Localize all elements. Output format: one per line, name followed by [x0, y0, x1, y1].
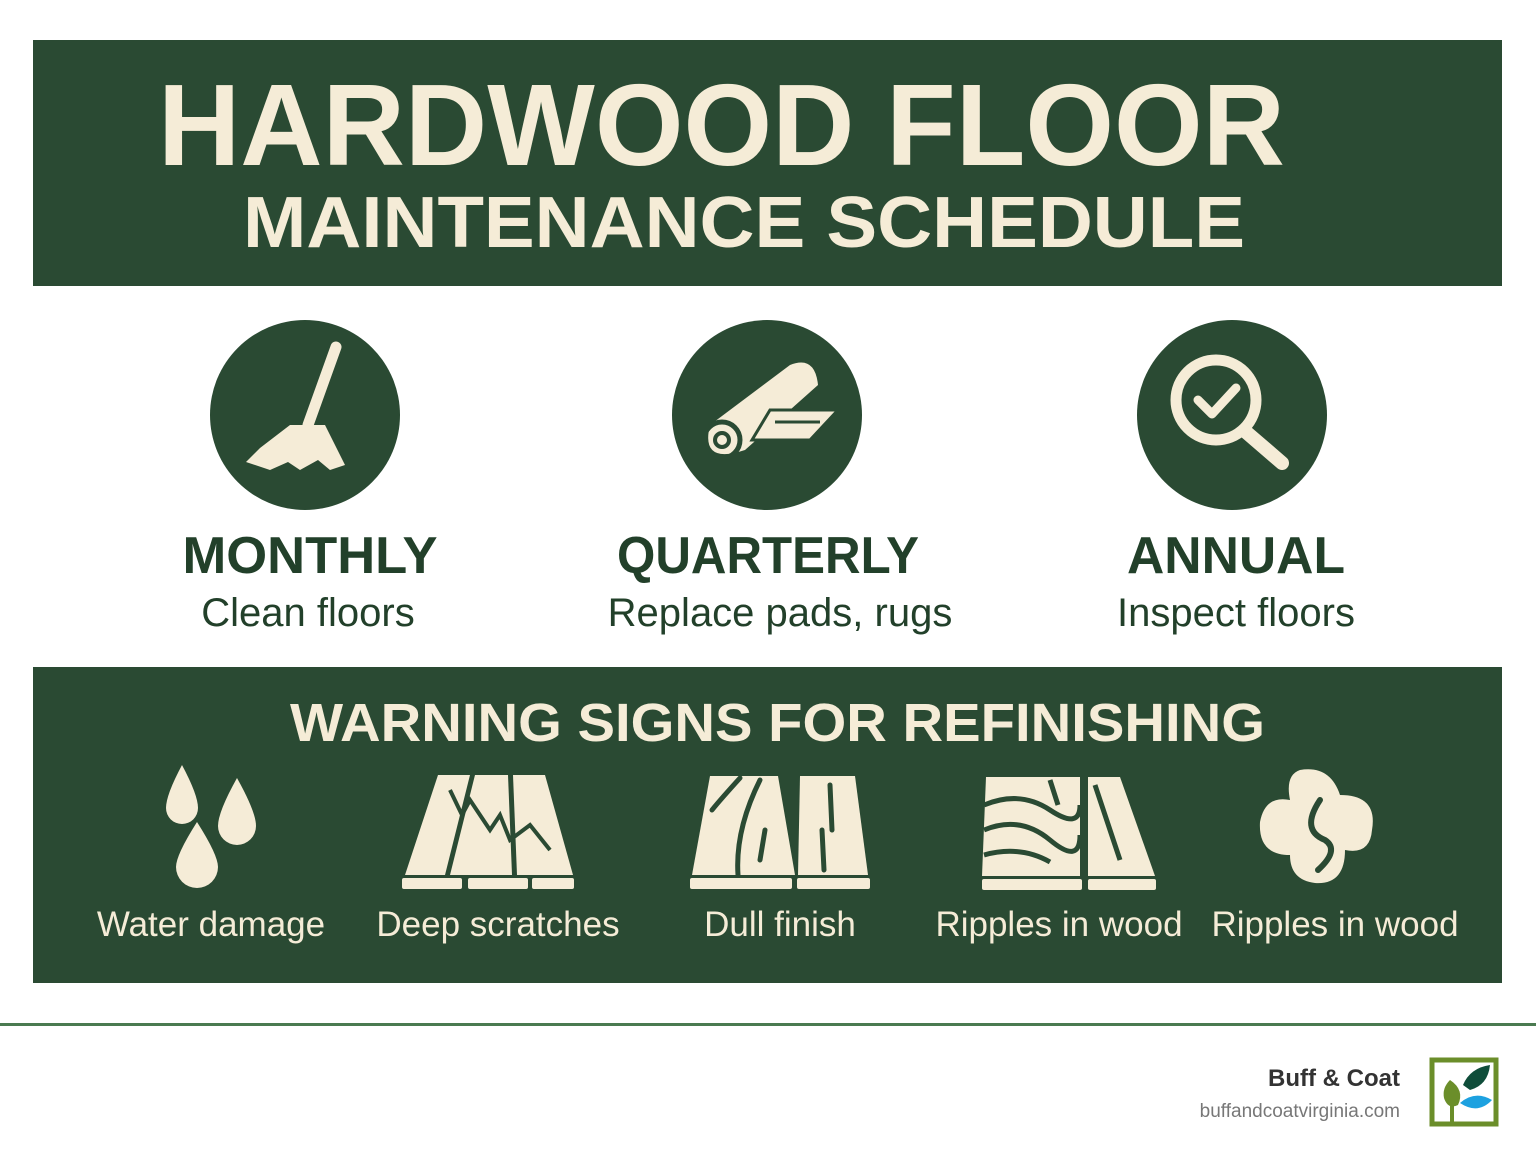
label: ripples in wood: Ripples in wood: [935, 905, 1183, 944]
schedule: annual: Inspect floors: [1117, 591, 1355, 635]
icon: water drops: [166, 765, 256, 888]
schedule: quarterly: [608, 320, 952, 635]
panel: warning signs: [33, 667, 1502, 983]
footer brand text: Buff & Coat: [1268, 1065, 1400, 1092]
footer brand text: buffandcoatvirginia.com: [1200, 1101, 1400, 1122]
icon: deep scratches: [402, 775, 574, 889]
label: ripples in wood 2: Ripples in wood: [1211, 905, 1459, 944]
title: HARDWOOD FLOOR: [158, 60, 1285, 190]
icon: dull finish: [690, 776, 870, 889]
schedule: monthly: [182, 320, 438, 635]
schedule: monthly: Clean floors: [201, 591, 415, 635]
label: quarterly: QUARTERLY: [617, 527, 919, 585]
icon: blob: [1260, 769, 1373, 883]
label: monthly: MONTHLY: [182, 527, 438, 585]
schedule: quarterly: Replace pads, rugs: [608, 591, 952, 635]
warning heading: WARNING SIGNS FOR REFINISHING: [290, 693, 1265, 753]
header panel: [33, 40, 1502, 286]
footer brand text: [1200, 1065, 1400, 1122]
icon: magnifier check: [1137, 320, 1327, 510]
icon: logo: [1432, 1060, 1496, 1124]
icon: rug roll: [672, 320, 862, 510]
schedule: annual: [1117, 320, 1355, 635]
label: water damage: Water damage: [97, 905, 325, 944]
icon: ripples: [982, 777, 1156, 890]
icon: mop: [210, 320, 400, 510]
label: annual: ANNUAL: [1127, 527, 1345, 585]
label: dull finish: Dull finish: [704, 905, 856, 944]
subtitle: MAINTENANCE SCHEDULE: [243, 183, 1245, 263]
label: deep scratches: Deep scratches: [376, 905, 620, 944]
